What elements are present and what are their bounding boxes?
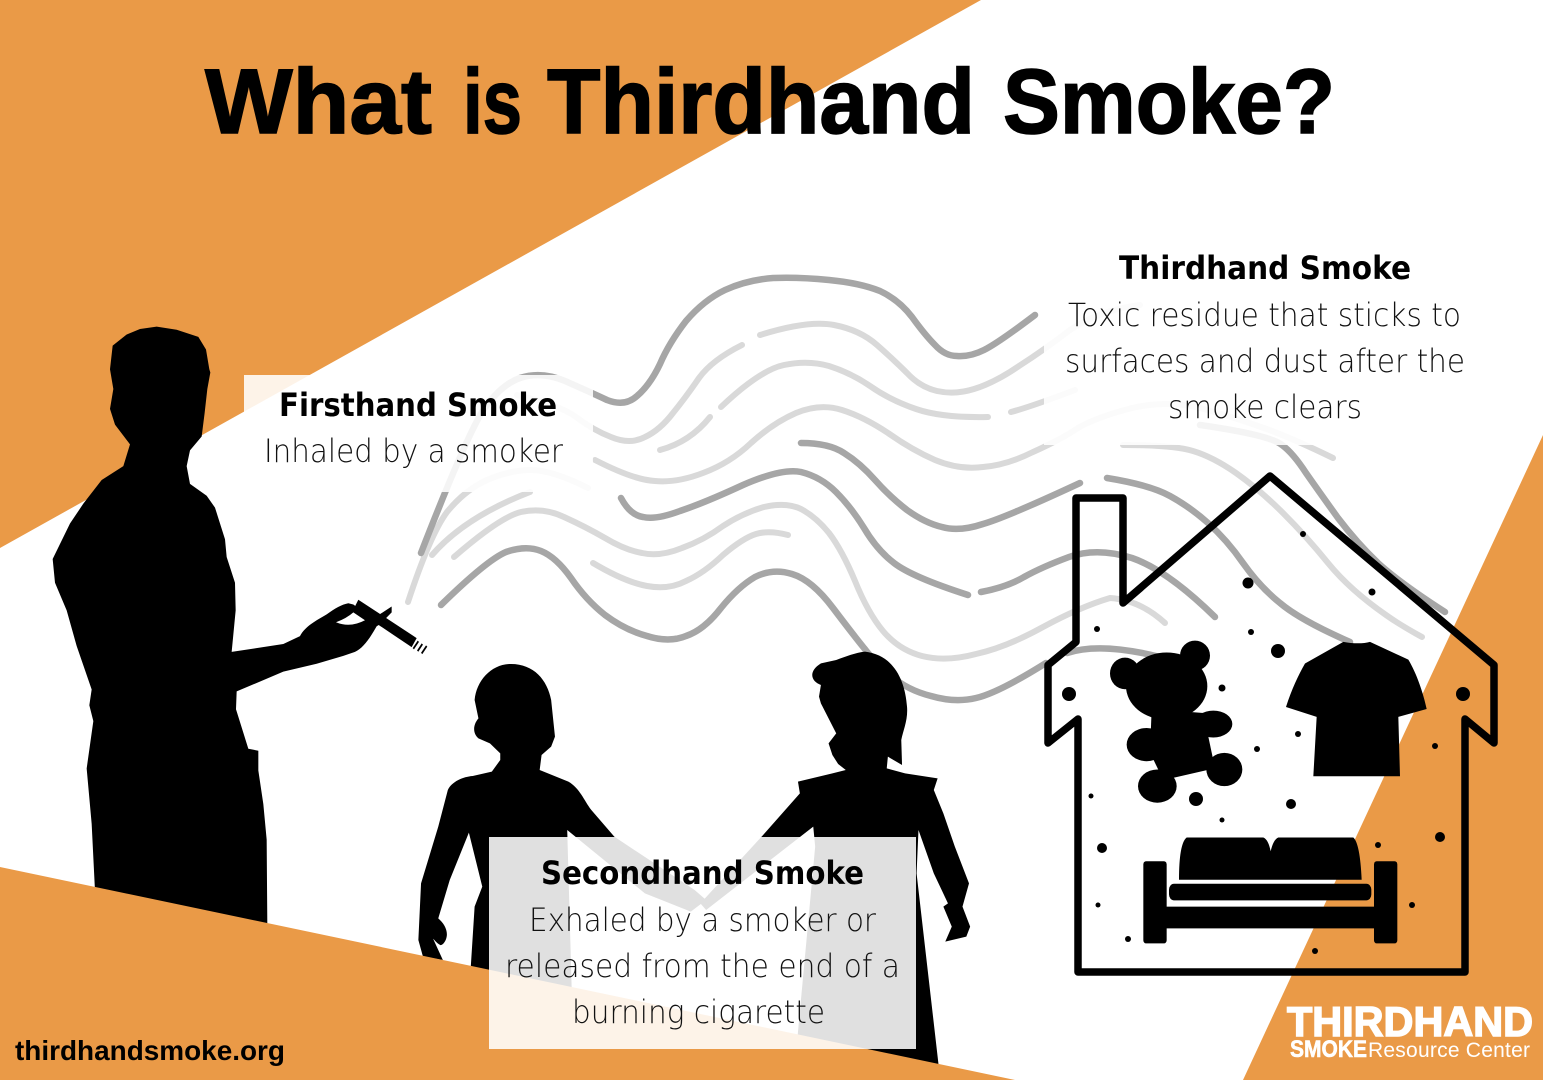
text block: secondhand smoke (505, 854, 900, 1031)
text block: thirdhand smoke: surfaces and dust after the (1065, 342, 1465, 380)
silhouette: adult smoker with cigarette (53, 327, 427, 927)
smoke trails (408, 278, 1445, 700)
icon: sofa (1143, 837, 1397, 943)
background: top-left orange triangle (0, 0, 981, 548)
text block: firsthand smoke: Firsthand Smoke (279, 386, 557, 424)
logo: Thirdhand Smoke Resource Center: SMOKE (1290, 1036, 1367, 1063)
text block: thirdhand smoke (1065, 249, 1465, 426)
text block: secondhand smoke: Secondhand Smoke (541, 854, 864, 892)
text block: thirdhand smoke: smoke clears (1168, 388, 1362, 426)
text block: thirdhand smoke: Toxic residue that sticks to (1068, 296, 1461, 334)
text block: secondhand smoke: burning cigarette (572, 993, 825, 1031)
logo: Thirdhand Smoke Resource Center: Resource Center (1368, 1039, 1530, 1062)
text block: thirdhand smoke: Thirdhand Smoke (1119, 249, 1411, 287)
text block: secondhand smoke: released from the end of a (505, 947, 900, 985)
icon: t-shirt (1286, 642, 1427, 776)
title (205, 51, 1335, 153)
title: What (205, 51, 432, 153)
title: Smoke? (1003, 51, 1335, 153)
website url: thirdhandsmoke.org (15, 1035, 285, 1066)
panel: firsthand smoke backing (244, 375, 593, 492)
panel: secondhand smoke backing (489, 837, 916, 1049)
house outline (1048, 476, 1494, 972)
logo: Thirdhand Smoke Resource Center: THIRDHAND (1287, 998, 1533, 1045)
icon: cigarette (354, 600, 427, 653)
silhouettes: two children holding hands (418, 652, 970, 1073)
text block: firsthand smoke (264, 386, 564, 470)
title: Thirdhand (547, 51, 975, 153)
text block: secondhand smoke: Exhaled by a smoker or (529, 901, 877, 939)
panel: thirdhand smoke backing (1044, 246, 1490, 445)
icon: teddy bear (1110, 641, 1242, 803)
icon: house with contaminated belongings (1048, 476, 1494, 972)
background: right orange triangle (1243, 435, 1543, 1080)
residue particles (1062, 531, 1470, 954)
title: is (463, 51, 522, 153)
text block: firsthand smoke: Inhaled by a smoker (264, 432, 564, 470)
background: bottom-left orange triangle (0, 867, 1015, 1080)
